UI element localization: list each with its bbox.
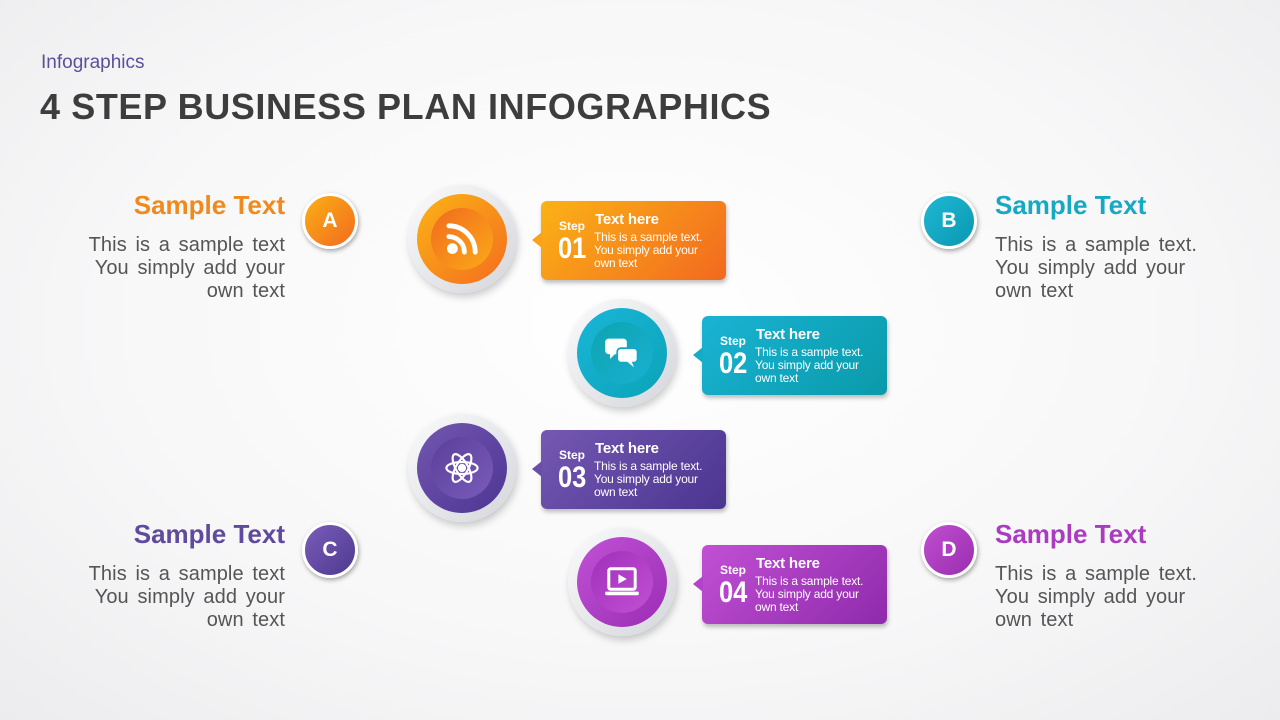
text D: This is a sample text.	[995, 563, 1197, 585]
step 3 icon circle	[408, 414, 516, 522]
step 1 box: 01	[558, 232, 586, 265]
step 4 box: own text	[755, 600, 798, 614]
step 4 box: You simply add your	[755, 587, 859, 601]
step 1 box: own text	[594, 256, 637, 270]
text C: own text	[207, 609, 285, 631]
letter B	[921, 193, 977, 249]
step 1 box: Text here	[595, 211, 659, 228]
text A: own text	[207, 280, 285, 302]
step 1 icon circle	[408, 185, 516, 293]
step 2 icon circle	[568, 299, 676, 407]
step 3 box: Step	[559, 448, 585, 462]
step 1 box: Step	[559, 219, 585, 233]
step 3 box: Text here	[595, 440, 659, 457]
title: 4 STEP BUSINESS PLAN INFOGRAPHICS	[40, 86, 771, 127]
step 2 box: Text here	[756, 326, 820, 343]
icon: rss	[446, 223, 478, 255]
icon: laptop play	[605, 567, 639, 596]
text B: You simply add your	[995, 257, 1185, 279]
icon: atom	[445, 453, 479, 483]
step 1 box: You simply add your	[594, 243, 698, 257]
block A	[89, 190, 362, 302]
letter D: D	[941, 538, 957, 561]
step 2 box: This is a sample text.	[755, 345, 863, 359]
text B: This is a sample text.	[995, 234, 1197, 256]
step 3 box: You simply add your	[594, 472, 698, 486]
subtitle: Infographics	[41, 52, 145, 73]
step 4 box	[702, 545, 887, 624]
step 3 box: This is a sample text.	[594, 459, 702, 473]
text C: This is a sample text	[89, 563, 285, 585]
step 3 box: 03	[558, 461, 586, 494]
text A: You simply add your	[95, 257, 285, 279]
text C	[89, 563, 285, 631]
step 4 box: Text here	[756, 555, 820, 572]
heading D: Sample Text	[995, 519, 1146, 549]
text C: You simply add your	[95, 586, 285, 608]
step 2 box: You simply add your	[755, 358, 859, 372]
text D: You simply add your	[995, 586, 1185, 608]
text D: own text	[995, 609, 1073, 631]
letter A	[302, 193, 358, 249]
letter C: C	[322, 538, 338, 561]
heading A: Sample Text	[134, 190, 285, 220]
step 1 box	[541, 201, 726, 280]
step 4 icon circle	[568, 528, 676, 636]
step 3 box	[541, 430, 726, 509]
step 2 box	[702, 316, 887, 395]
step 4 box: 04	[719, 576, 747, 609]
block B	[919, 190, 1197, 302]
step 4 box: Step	[720, 563, 746, 577]
letter B: B	[941, 209, 957, 232]
step 2 box: 02	[719, 347, 747, 380]
text B	[995, 234, 1197, 302]
step 1 box: This is a sample text.	[594, 230, 702, 244]
block C	[89, 519, 362, 631]
letter C	[302, 522, 358, 578]
text D	[995, 563, 1197, 631]
step 2 box: Step	[720, 334, 746, 348]
icon: chat	[605, 338, 637, 368]
heading B: Sample Text	[995, 190, 1146, 220]
text B: own text	[995, 280, 1073, 302]
text A: This is a sample text	[89, 234, 285, 256]
text A	[89, 234, 285, 302]
step 4 box: This is a sample text.	[755, 574, 863, 588]
block D	[919, 519, 1197, 631]
step 3 box: own text	[594, 485, 637, 499]
step 2 box: own text	[755, 371, 798, 385]
letter D	[921, 522, 977, 578]
letter A: A	[322, 209, 338, 232]
heading C: Sample Text	[134, 519, 285, 549]
